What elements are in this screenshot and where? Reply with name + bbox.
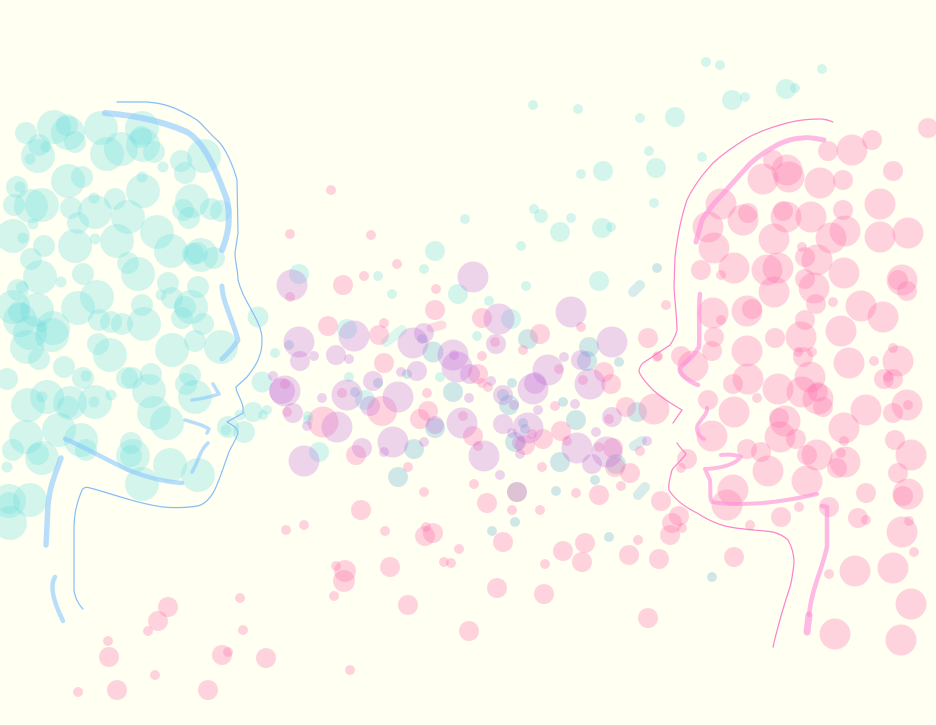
teal bubbles in left head [0,110,280,540]
right face: thick pink shading strokes [680,138,827,632]
right face: thin pink chin and neck outline [669,443,794,647]
right face: thin pink profile outline [639,119,833,423]
capsule shaped bubble smears [386,285,645,495]
left face: thin blue profile outline [74,102,262,609]
blue-grey bubbles in the mixing zone [284,263,717,582]
left face: thick blue shading strokes [46,113,238,621]
teal bubbles drifting through the middle and upper right [289,57,827,462]
pink bubbles in right head [653,118,936,656]
purple bubbles in the mixing zone [268,262,652,480]
pink bubbles scattered through the middle and bottom [73,185,671,700]
